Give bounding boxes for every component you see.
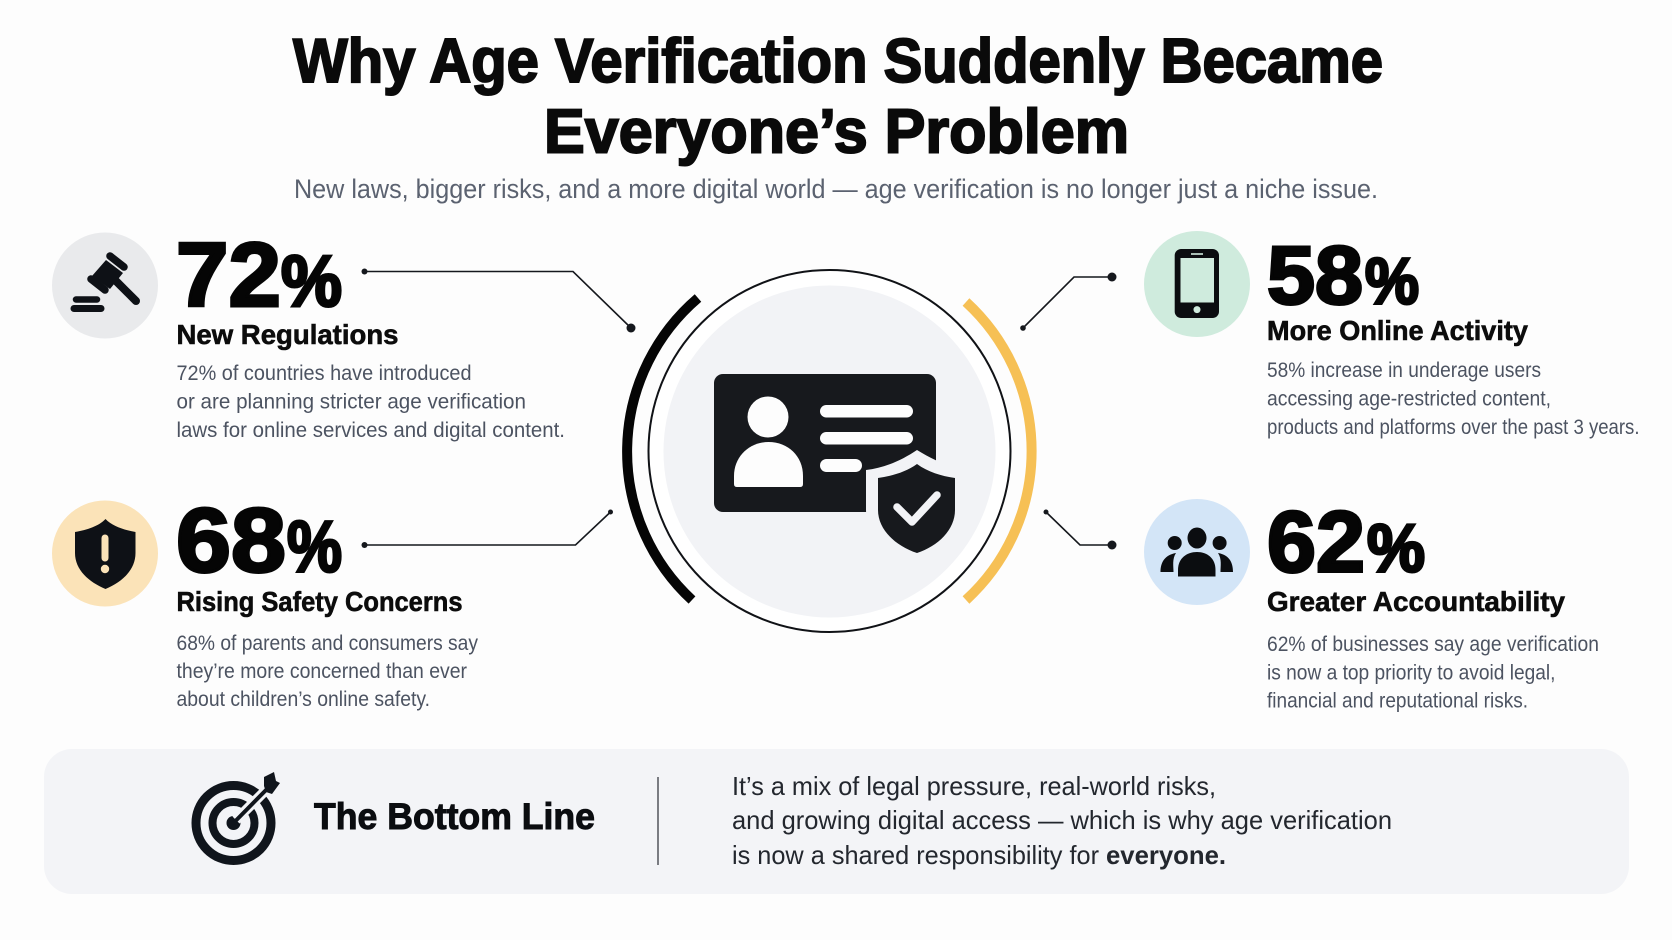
bottom line text: and growing digital access — which is why age verification	[732, 805, 1392, 835]
connector: more online activity	[1020, 272, 1116, 331]
yellow arc	[966, 302, 1032, 600]
description: rising safety concerns	[176, 631, 478, 711]
stat: 68%	[176, 490, 342, 592]
panel: the bottom line	[44, 749, 1629, 894]
description: more online activity	[1267, 358, 1640, 439]
heading: rising safety concerns: Rising Safety Concerns	[176, 586, 462, 617]
title: Everyone’s Problem	[544, 98, 1129, 166]
icon: id card	[714, 374, 936, 512]
description: rising safety concerns: they’re more concerned than ever	[176, 659, 467, 683]
description: greater accountability: is now a top priority to avoid legal,	[1267, 660, 1556, 684]
description: new regulations: laws for online services and digital content.	[176, 418, 565, 442]
stat: 68%: %	[287, 508, 342, 588]
description: greater accountability: 62% of businesses say age verification	[1267, 632, 1599, 656]
bottom line text: It’s a mix of legal pressure, real-world risks,	[732, 771, 1216, 801]
panel: new regulations	[52, 225, 636, 442]
stat: 58%: %	[1365, 244, 1419, 318]
icon: people group	[1144, 499, 1250, 605]
description: rising safety concerns: about children’s online safety.	[176, 687, 430, 711]
stat: 72%	[176, 225, 342, 326]
description: more online activity: accessing age-restricted content,	[1267, 386, 1551, 410]
icon: verified shield	[866, 450, 968, 566]
icon: gavel	[52, 232, 158, 338]
connector: greater accountability	[1044, 510, 1116, 550]
thin outer ring	[648, 270, 1010, 632]
description: greater accountability	[1267, 632, 1599, 712]
panel: more online activity	[1020, 228, 1640, 439]
heading: the bottom line: The Bottom Line	[314, 796, 595, 837]
description: greater accountability: financial and reputational risks.	[1267, 688, 1528, 712]
connector: rising safety concerns	[362, 510, 613, 548]
icon: warning shield	[52, 500, 158, 606]
heading: more online activity: More Online Activity	[1267, 315, 1528, 346]
stat: 72%: %	[281, 242, 342, 322]
panel: rising safety concerns	[52, 490, 613, 711]
heading: greater accountability: Greater Accountability	[1267, 586, 1565, 617]
stat: 68%: 68	[176, 490, 286, 592]
icon: target with arrow	[196, 772, 280, 860]
description: more online activity: 58% increase in underage users	[1267, 358, 1541, 382]
title: Why Age Verification Suddenly Became	[293, 27, 1383, 96]
bottom line background	[44, 749, 1629, 894]
subtitle: New laws, bigger risks, and a more digital world — age verification is no longer just a niche issue.	[294, 174, 1378, 204]
black arc	[627, 298, 698, 600]
stat: 62%: 62	[1267, 494, 1365, 590]
bottom line text	[732, 771, 1392, 870]
description: new regulations	[176, 361, 565, 442]
connector: new regulations	[362, 268, 636, 332]
icon: smartphone	[1144, 231, 1250, 337]
heading: new regulations: New Regulations	[176, 319, 398, 350]
description: new regulations: or are planning stricter age verification	[176, 390, 526, 414]
stat: 58%: 58	[1267, 228, 1363, 322]
stat: 62%: %	[1367, 510, 1425, 586]
central emblem	[627, 270, 1032, 632]
grey disc	[664, 286, 996, 618]
title	[293, 27, 1383, 166]
bottom line text: is now a shared responsibility for	[732, 840, 1099, 870]
description: new regulations: 72% of countries have introduced	[176, 361, 472, 385]
panel: greater accountability	[1044, 494, 1599, 712]
bottom line text: everyone.	[1106, 840, 1226, 870]
description: rising safety concerns: 68% of parents and consumers say	[176, 631, 478, 655]
stat: 62%	[1267, 494, 1425, 590]
stat: 58%	[1267, 228, 1419, 322]
stat: 72%: 72	[176, 225, 281, 326]
